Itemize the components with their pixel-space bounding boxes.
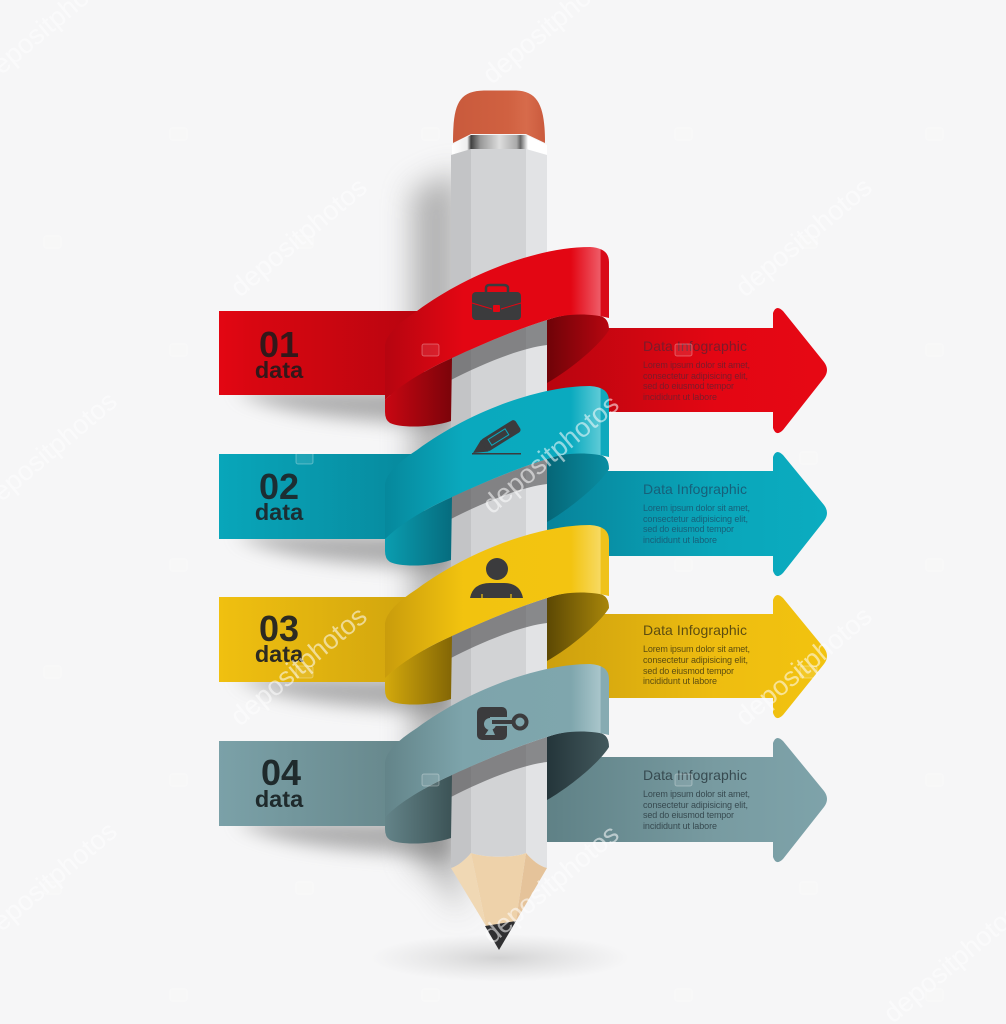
arrow text 4 [643,767,750,831]
arrow text 3: Data Infographic [643,622,747,638]
arrow 1 [547,308,827,433]
pencil body centre facet [471,149,526,857]
number 02: 02 [259,466,299,507]
arrow text 2: Data Infographic [643,481,747,497]
pencil body left facet [451,149,471,868]
watermark: depositphotos [225,601,373,732]
icon: key and lock [477,707,526,740]
wrap 1 [385,247,609,427]
icon: person [470,558,523,598]
arrow text 1: Data Infographic [643,338,747,354]
watermark: depositphotos [477,819,625,950]
arrow text 3: consectetur adipisicing elit, [643,655,748,665]
arrow text 1: consectetur adipisicing elit, [643,371,748,381]
wrap 3 [385,525,609,705]
pencil body right facet [526,149,547,868]
arrow text 2: incididunt ut labore [643,535,717,545]
strip 4 [219,741,424,826]
pencil [451,90,547,950]
arrow text 2: Lorem ipsum dolor sit amet, [643,503,750,513]
arrow text 1: incididunt ut labore [643,392,717,402]
strip 3 [219,597,424,682]
wrap 2 [385,386,609,566]
arrow text 3: Lorem ipsum dolor sit amet, [643,644,750,654]
number 04: 04 [261,752,301,793]
watermark: depositphotos [730,601,878,732]
ribbon 2: teal [219,386,827,576]
arrow text 4: Data Infographic [643,767,747,783]
arrow text 2: consectetur adipisicing elit, [643,514,748,524]
arrow text 1: Lorem ipsum dolor sit amet, [643,360,750,370]
metal band [452,135,547,155]
strip shadows [235,390,450,859]
arrow text 3 [643,622,750,686]
pencil lead [485,921,516,950]
arrow text 1 [643,338,750,402]
arrow 4 [547,738,827,862]
watermark: depositphotos [225,172,373,303]
arrow text 4: sed do eiusmod tempor [643,810,734,820]
icon: briefcase [472,285,521,320]
ribbon 4: grey [219,664,827,862]
number 01: 01 [259,324,299,365]
watermark: depositphotos [477,389,625,520]
label data: data [255,641,304,667]
strip 1 [219,311,424,395]
arrow text 4: consectetur adipisicing elit, [643,800,748,810]
pencil wood tip [451,853,486,926]
arrow text 3: incididunt ut labore [643,676,717,686]
number 03: 03 [259,608,299,649]
eraser [453,90,545,143]
pencil shadow [412,170,460,915]
wrap 4 [385,664,609,844]
arrow text 1: sed do eiusmod tempor [643,381,734,391]
watermark: depositphotos [730,172,878,303]
floor shadow [370,934,630,982]
ribbon 3: yellow [219,525,827,718]
arrow text 2: sed do eiusmod tempor [643,524,734,534]
arrow 3 [547,595,827,718]
arrow text 4: Lorem ipsum dolor sit amet, [643,789,750,799]
label data: data [255,786,304,812]
ribbon 1: red [219,247,827,433]
icon: pencil [469,419,522,459]
strip 2 [219,454,424,539]
label data: data [255,499,304,525]
label data: data [255,357,304,383]
arrow text 3: sed do eiusmod tempor [643,666,734,676]
arrow text 4: incididunt ut labore [643,821,717,831]
arrow text 2 [643,481,750,545]
arrow 2 [547,452,827,576]
